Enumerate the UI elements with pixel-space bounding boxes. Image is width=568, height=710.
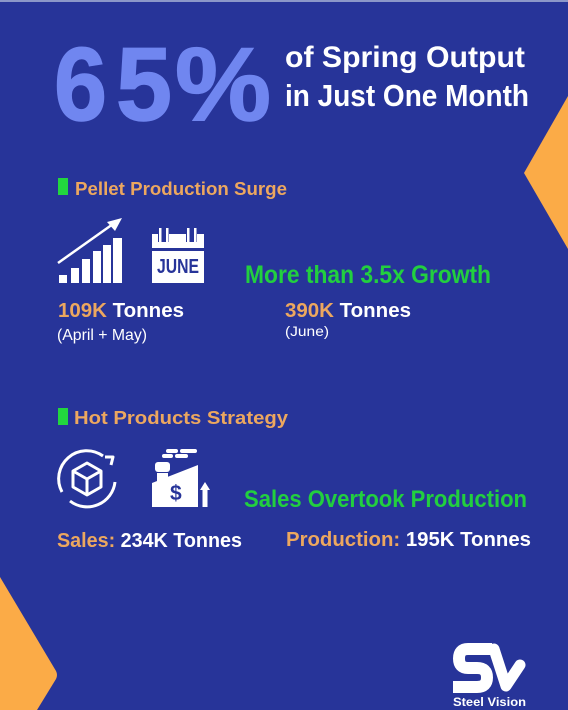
icon: factory with dollar: $: [170, 482, 182, 505]
icon: June calendar: [152, 228, 204, 283]
right orange hexagon accent: [524, 96, 568, 249]
logo: Steel Vision: Steel Vision: [453, 695, 526, 709]
section heading: pellet production: Pellet Production Surge: [75, 179, 287, 199]
stat: 109K tonnes: 109K Tonnes: [58, 300, 184, 322]
left orange hexagon accent: [0, 577, 57, 710]
headline text: [285, 41, 529, 113]
icon: June calendar: JUNE: [157, 256, 199, 278]
callout: more than 3.5x growth: More than 3.5x Growth: [245, 261, 491, 289]
stat: 390K tonnes: 390K Tonnes: [285, 300, 411, 322]
logo: Steel Vision: [453, 649, 526, 709]
stat: production: Production: 195K Tonnes: [286, 529, 531, 551]
headline percentage: 5: [116, 27, 172, 143]
headline percentage: %: [175, 27, 271, 143]
icon: rising bar chart with arrow: [58, 218, 122, 283]
headline text: in Just One Month: [285, 78, 529, 113]
section heading: hot products: Hot Products Strategy: [74, 408, 288, 428]
icon: rotating box: [59, 451, 115, 507]
stat: 109K tonnes: [57, 300, 184, 344]
stat: 390K tonnes: (June): [285, 323, 329, 339]
callout: sales overtook production: Sales Overtook Production: [244, 486, 527, 513]
stat: 390K tonnes: [285, 300, 411, 339]
headline percentage: [54, 27, 271, 143]
stat: sales: Sales: 234K Tonnes: [57, 530, 242, 552]
icon: factory with dollar: [152, 449, 210, 507]
stat: 109K tonnes: (April + May): [57, 327, 147, 344]
headline percentage: 6: [54, 27, 107, 143]
headline text: of Spring Output: [285, 41, 525, 74]
